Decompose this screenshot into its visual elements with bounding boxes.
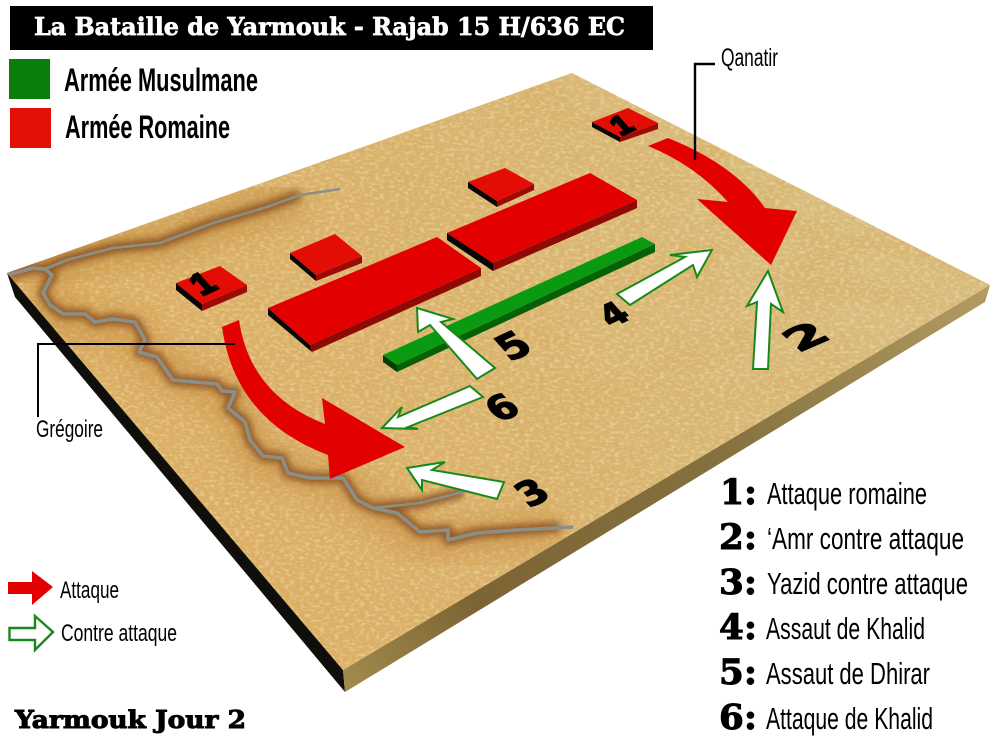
map number 5: 5 — [486, 324, 542, 369]
key item 4 — [719, 607, 925, 648]
key item 5: Assaut de Dhirar — [766, 656, 930, 691]
icon: red attack arrow — [8, 571, 53, 605]
callout: Grégoire: Grégoire — [36, 416, 103, 443]
legend label: Roman army: Armée Romaine — [65, 109, 230, 145]
map number 4: 4 — [590, 295, 638, 334]
map number 6: 6 — [475, 386, 529, 430]
Roman unit: large line right — [447, 173, 637, 271]
title bar — [10, 6, 653, 50]
number 1 on right block: 1 — [604, 110, 641, 141]
key item 6: 6: — [719, 697, 757, 738]
map number 3: 3 — [505, 471, 559, 515]
red attack arrow: right flank — [648, 138, 797, 265]
key item 3: 3: — [719, 562, 757, 603]
key item 1: Attaque romaine — [767, 476, 927, 511]
board left edge — [7, 273, 345, 692]
Roman unit: large line left — [268, 237, 481, 352]
counter-attack arrow 3 — [407, 462, 504, 499]
key item 1 — [720, 472, 927, 513]
legend swatch: Muslim army — [9, 59, 50, 99]
counter-attack arrow 4 — [617, 250, 712, 305]
key item 2 — [719, 517, 964, 558]
key item 1: 1: — [720, 472, 757, 513]
key item 4: Assaut de Khalid — [766, 611, 925, 646]
numbered key — [719, 472, 968, 738]
legend swatch: Roman army — [10, 108, 51, 148]
key item 4: 4: — [719, 607, 757, 648]
Roman unit: small reserve block left — [290, 234, 362, 281]
number 1 on block: 1 — [182, 266, 224, 302]
Roman unit: left flank block with 1 — [176, 266, 247, 311]
legend label: attack: Attaque — [60, 577, 119, 604]
counter-attack arrow 5 — [417, 308, 495, 379]
legend label: Muslim army: Armée Musulmane — [64, 62, 258, 98]
key item 5 — [719, 652, 930, 693]
red attack arrow: left flank — [222, 320, 405, 479]
river — [8, 189, 573, 540]
Roman unit: small reserve block right — [468, 168, 534, 207]
key item 6 — [719, 697, 933, 738]
callout: Qanatir: Qanatir — [721, 44, 778, 72]
icon: green counter-attack arrow — [10, 616, 53, 650]
callout: Qanatir — [695, 44, 778, 160]
callout: Grégoire — [36, 344, 235, 443]
board right edge — [343, 285, 990, 692]
counter-attack arrow 2 — [747, 271, 783, 369]
legend label: counter-attack: Contre attaque — [61, 620, 177, 647]
map number 2: 2 — [772, 315, 840, 359]
Roman unit: right flank block with 1 — [592, 108, 658, 142]
key item 3 — [719, 562, 968, 603]
key item 5: 5: — [719, 652, 757, 693]
counter-attack arrow 6 — [382, 386, 483, 429]
key item 2: 2: — [719, 517, 757, 558]
title bar: La Bataille de Yarmouk - Rajab 15 H/636 EC — [34, 12, 625, 41]
legend: armies — [9, 59, 258, 148]
legend: arrows — [8, 571, 177, 650]
subtitle: day 2: Yarmouk Jour 2 — [14, 705, 246, 734]
Muslim army line — [383, 237, 655, 372]
